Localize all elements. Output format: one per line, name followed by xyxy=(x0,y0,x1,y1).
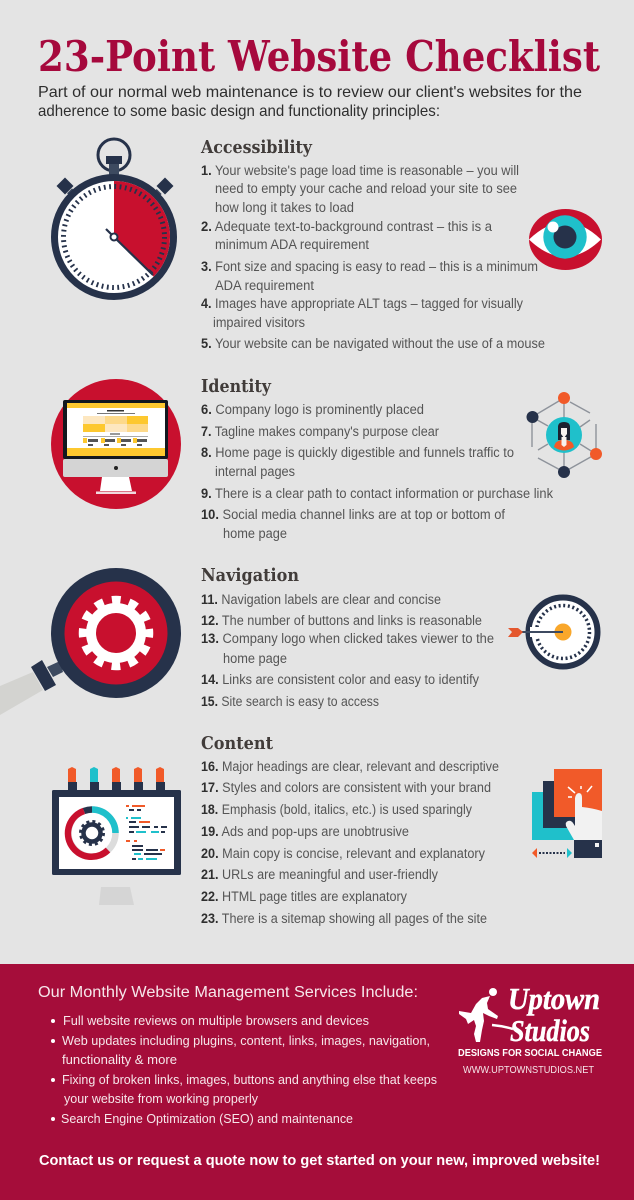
checklist items 6-10: 10. Social media channel links are at top or bottom of xyxy=(201,507,505,522)
footer heading: Our Monthly Website Management Services Include: xyxy=(38,984,418,1001)
checklist items 1-5: impaired visitors xyxy=(213,315,305,330)
checklist items 1-5: ADA requirement xyxy=(215,278,314,293)
checklist items 6-10: home page xyxy=(223,526,287,541)
heading: identity: Identity xyxy=(201,376,271,397)
icon: stopwatch xyxy=(54,139,174,296)
icon: desktop monitor on red circle xyxy=(51,379,181,509)
checklist items 11-15: 15. Site search is easy to access xyxy=(201,694,379,709)
checklist items 16-23: 16. Major headings are clear, relevant and descriptive xyxy=(201,759,499,774)
services bullet list: Search Engine Optimization (SEO) and maintenance xyxy=(61,1111,353,1126)
checklist items 16-23: 21. URLs are meaningful and user-friendly xyxy=(201,867,438,882)
panel: accessibility xyxy=(54,137,602,351)
icon: magnifier with gear xyxy=(0,568,181,715)
checklist items 6-10: 6. Company logo is prominently placed xyxy=(201,402,424,417)
checklist items 1-5: how long it takes to load xyxy=(215,200,354,215)
checklist items 1-5: 4. Images have appropriate ALT tags – tagged for visually xyxy=(201,296,523,311)
services bullet list xyxy=(51,1013,437,1126)
checklist items 11-15: home page xyxy=(223,651,287,666)
checklist items 1-5: 1. Your website's page load time is reasonable – you will xyxy=(201,163,519,178)
checklist items 1-5: minimum ADA requirement xyxy=(215,237,369,252)
panel: navigation xyxy=(0,565,598,715)
checklist items 16-23: 17. Styles and colors are consistent with your brand xyxy=(201,780,491,795)
icon: hand tapping layered squares xyxy=(532,769,602,858)
icon: monitor with plugs and gear chart xyxy=(52,767,181,905)
heading: content: Content xyxy=(201,733,274,754)
checklist items 16-23: 23. There is a sitemap showing all pages of the site xyxy=(201,911,487,926)
icon: target with arrow xyxy=(508,598,598,666)
services bullet list: functionality & more xyxy=(62,1052,177,1067)
panel: identity xyxy=(51,376,602,541)
checklist items 6-10: 7. Tagline makes company's purpose clear xyxy=(201,424,439,439)
icon: people network xyxy=(526,392,602,478)
checklist items 6-10: 9. There is a clear path to contact information or purchase link xyxy=(201,486,553,501)
checklist items 11-15: 13. Company logo when clicked takes viewer to the xyxy=(201,631,494,646)
checklist items 6-10: internal pages xyxy=(215,464,295,479)
logo: Uptown Studios: Uptown xyxy=(508,981,600,1016)
checklist items 6-10 xyxy=(201,402,553,541)
checklist items 11-15 xyxy=(201,592,494,709)
checklist items 1-5: 5. Your website can be navigated without the use of a mouse xyxy=(201,336,545,351)
panel: footer xyxy=(0,964,634,1200)
checklist items 16-23: 22. HTML page titles are explanatory xyxy=(201,889,407,904)
services bullet list: Web updates including plugins, content, links, images, navigation, xyxy=(62,1033,430,1048)
logo: Uptown Studios: WWW.UPTOWNSTUDIOS.NET xyxy=(463,1064,595,1076)
logo: Uptown Studios: DESIGNS FOR SOCIAL CHANGE xyxy=(458,1048,602,1059)
checklist items 11-15: 11. Navigation labels are clear and concise xyxy=(201,592,441,607)
checklist items 16-23: 19. Ads and pop-ups are unobtrusive xyxy=(201,824,409,839)
checklist items 1-5: 3. Font size and spacing is easy to read – this is a minimum xyxy=(201,259,538,274)
checklist items 16-23: 18. Emphasis (bold, italics, etc.) is used sparingly xyxy=(201,802,472,817)
checklist items 11-15: 14. Links are consistent color and easy to identify xyxy=(201,672,479,687)
intro text: Part of our normal web maintenance is to review our client's websites for the xyxy=(38,84,582,101)
services bullet list: Fixing of broken links, images, buttons and anything else that keeps xyxy=(62,1072,437,1087)
icon: eye xyxy=(529,209,602,270)
heading: navigation: Navigation xyxy=(201,565,299,586)
logo: Uptown Studios: Studios xyxy=(510,1013,590,1048)
heading: accessibility: Accessibility xyxy=(200,137,312,158)
checklist items 11-15: 12. The number of buttons and links is reasonable xyxy=(201,613,482,628)
intro text: adherence to some basic design and functionality principles: xyxy=(38,103,440,120)
intro text xyxy=(38,84,582,120)
logo: Uptown Studios xyxy=(458,981,602,1076)
checklist items 1-5: 2. Adequate text-to-background contrast – this is a xyxy=(201,219,492,234)
checklist items 16-23: 20. Main copy is concise, relevant and explanatory xyxy=(201,846,485,861)
checklist items 1-5 xyxy=(201,163,545,351)
checklist items 1-5: need to empty your cache and reload your site to see xyxy=(215,181,517,196)
call to action: Contact us or request a quote now to get started on your new, improved website! xyxy=(39,1153,600,1169)
checklist items 6-10: 8. Home page is quickly digestible and funnels traffic to xyxy=(201,445,514,460)
services bullet list: Full website reviews on multiple browsers and devices xyxy=(63,1013,369,1028)
panel: content xyxy=(52,733,602,926)
checklist items 16-23 xyxy=(201,759,499,926)
services bullet list: your website from working properly xyxy=(64,1091,258,1106)
